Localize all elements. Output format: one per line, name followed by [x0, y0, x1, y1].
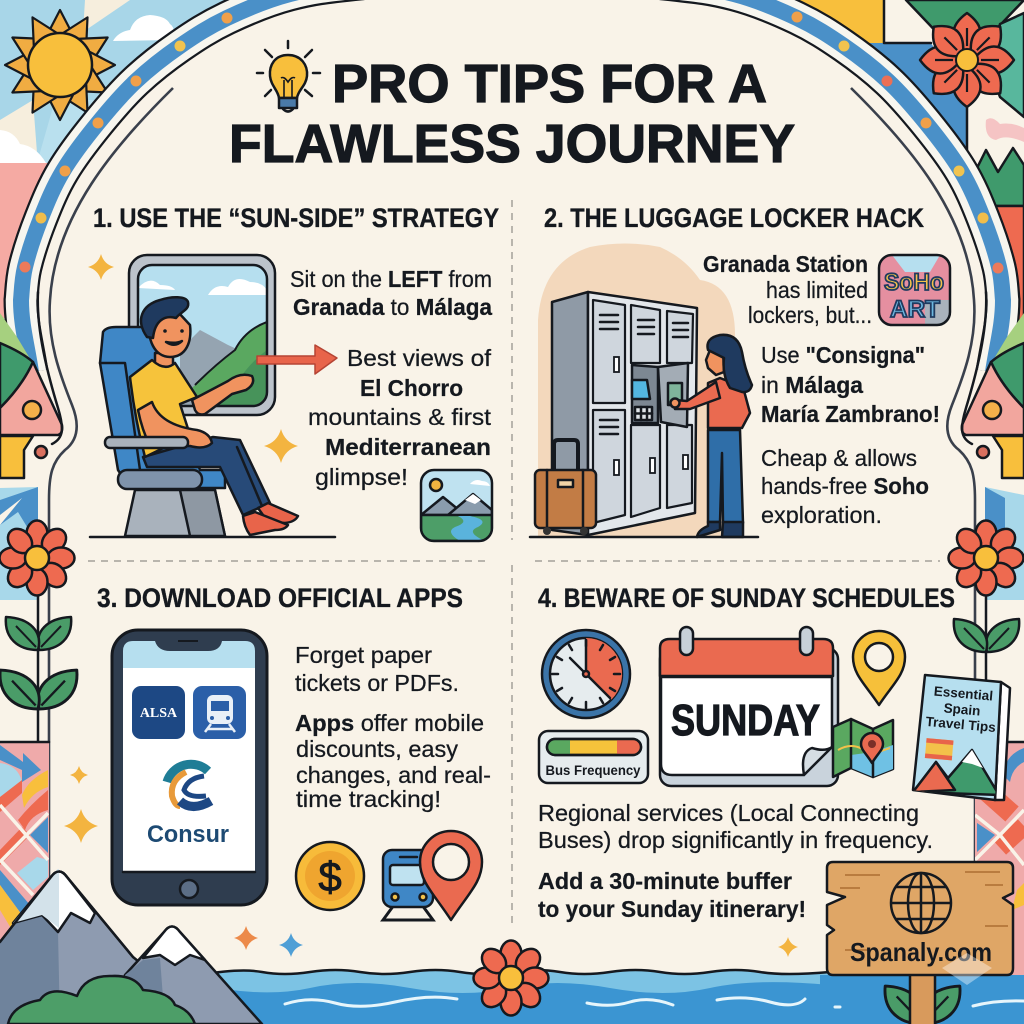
heading 3: 3. DOWNLOAD OFFICIAL APPS: [97, 583, 463, 613]
arrow: [257, 345, 337, 374]
sparkles: [64, 766, 303, 957]
title with lightbulb: FLAWLESS JOURNEY: [229, 114, 795, 174]
flower: top right: [920, 13, 1014, 107]
panel 4: Sunday schedules: [538, 583, 1010, 957]
icon: coin: $: [318, 853, 342, 900]
panel 4 text: to your Sunday itinerary!: [538, 896, 806, 922]
phone with app logos: [112, 630, 267, 905]
clock: [542, 630, 630, 718]
panel 4 text: Regional services (Local Connecting: [538, 800, 919, 826]
decor: top-right mosaic: [780, 0, 1024, 321]
decor: right patterned tile: [975, 743, 1024, 983]
plant: right flower with stems and leaves: [948, 520, 1024, 690]
icon: coin: [296, 842, 364, 910]
train window with landscape: [129, 255, 275, 415]
wooden signpost: Spanaly.com: [827, 862, 1013, 1024]
decor: left patterned tile: [0, 743, 49, 943]
icon: yellow pin: [853, 631, 905, 705]
panel 3 text: [295, 642, 491, 812]
icon: SoHo Art badge: [879, 255, 950, 325]
panel 3 text: changes, and real-: [296, 762, 491, 788]
guidebook: [913, 675, 1010, 800]
heading 4: 4. BEWARE OF SUNDAY SCHEDULES: [538, 583, 955, 613]
title with lightbulb: PRO TIPS FOR A: [332, 54, 767, 114]
panel 1 text: Sit on the LEFT from: [290, 266, 492, 292]
panel 3 text: discounts, easy: [296, 736, 459, 762]
sparkle: [88, 254, 114, 280]
panel 2 text: lockers, but...: [748, 302, 872, 328]
panel 1 text: Best views of: [347, 345, 492, 371]
heading 1: 1. USE THE “SUN-SIDE” STRATEGY: [93, 203, 499, 233]
mountains: [0, 869, 262, 1024]
bus frequency gauge: Bus Frequency: [546, 762, 641, 778]
panel 3 text: time tracking!: [296, 786, 441, 812]
sparkle: [778, 937, 798, 957]
icon: globe: [891, 873, 951, 933]
logo: Consur: [147, 764, 229, 848]
panel 2 text: in Málaga: [761, 372, 863, 398]
logo: Consur: Consur: [147, 821, 229, 848]
panel 1 text: mountains & first: [308, 404, 492, 430]
bus frequency gauge: [539, 731, 648, 783]
panel 4 text: [538, 800, 933, 922]
sea with waves: [200, 970, 1024, 1024]
panel 3: official apps: [64, 583, 491, 957]
panel 2 text: Cheap & allows: [761, 445, 917, 471]
floor line: [90, 536, 335, 538]
wooden signpost: Spanaly.com: Spanaly.com: [850, 937, 992, 967]
icon: sun: [5, 10, 115, 120]
peach backdrop: [538, 244, 735, 537]
logo: train app: [193, 686, 246, 739]
guidebook: Travel Tips: [925, 714, 996, 735]
panel 3 text: Forget paper: [295, 642, 432, 668]
heading 2: 2. THE LUGGAGE LOCKER HACK: [544, 203, 924, 233]
panel 2 text: Granada Station: [703, 251, 868, 277]
person seated: [130, 297, 298, 535]
panel 1 text: El Chorro: [360, 375, 463, 401]
calendar: SUNDAY: [671, 696, 820, 745]
panel 3 text: tickets or PDFs.: [295, 670, 459, 696]
plant: left flower with stems and leaves: [0, 520, 77, 743]
icon: SoHo Art badge: ART: [890, 296, 940, 323]
icon: folded map: [833, 719, 893, 777]
decorative arch band with dots: [20, 0, 1004, 372]
decor: right face profile: [962, 292, 1024, 600]
panel 1 text: [290, 266, 492, 490]
guidebook: Essential: [933, 684, 994, 704]
train seat: [100, 327, 225, 536]
icon: train and map pin: [383, 831, 482, 920]
decor: left face profile: [0, 292, 62, 600]
suitcase: [535, 440, 596, 535]
icon: lightbulb: [257, 41, 320, 112]
panel 1: sun-side strategy: [88, 203, 499, 541]
panel 2 text: María Zambrano!: [761, 401, 940, 427]
guidebook: Spain: [943, 700, 981, 719]
woman at kiosk: [670, 335, 752, 537]
flower: bottom centre: [474, 940, 548, 1016]
locker bank: [552, 292, 697, 535]
title with lightbulb: [229, 41, 795, 174]
icon: landscape thumbnail: [421, 470, 492, 541]
panel 1 text: Granada to Málaga: [293, 294, 492, 320]
logo: ALSA: ALSA: [140, 706, 178, 721]
decor: top-left sky with sun: [0, 0, 300, 318]
panel 1 text: glimpse!: [315, 464, 408, 490]
panel 2 text: Use "Consigna": [761, 342, 925, 368]
armrest: [105, 437, 188, 448]
panel 2: luggage locker hack: [530, 203, 950, 537]
watermark sparkle: [942, 953, 992, 985]
panel 1 text: Mediterranean: [325, 434, 491, 460]
sparkle: [264, 429, 298, 463]
panel 2 text: has limited: [766, 277, 868, 303]
logo: ALSA: [132, 686, 185, 739]
section dividers: [88, 200, 940, 925]
arch inner contour lines: [49, 88, 975, 880]
panel 2 text: hands-free Soho: [761, 473, 929, 499]
floor line: [530, 536, 758, 538]
panel 4 text: Add a 30-minute buffer: [538, 868, 792, 894]
panel 2 text: exploration.: [761, 502, 882, 528]
panel 3 text: Apps offer mobile: [295, 710, 484, 736]
panel 2 text: [703, 251, 940, 528]
ticket kiosk: [632, 363, 688, 427]
panel 4 text: Buses) drop significantly in frequency.: [538, 827, 933, 853]
icon: SoHo Art badge: SoHo: [884, 269, 944, 296]
tile outlines: [0, 741, 1024, 743]
calendar: [660, 627, 838, 786]
green bush: [8, 976, 195, 1024]
